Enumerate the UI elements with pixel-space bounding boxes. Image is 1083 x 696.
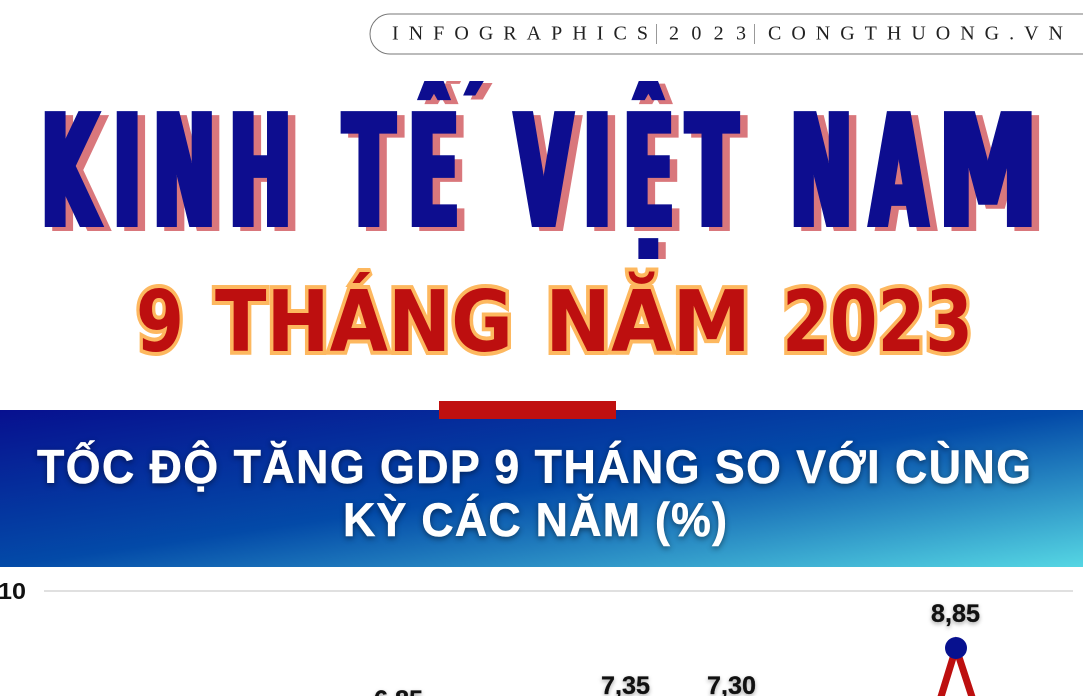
main title: Kinh tế Việt Nam	[44, 81, 1040, 259]
title shadow layer	[52, 81, 1040, 259]
red accent bar	[439, 401, 616, 419]
title shadow layer: KINH	[49, 85, 299, 270]
top pill: infographics 2023 congthuong.vn: INFOGRAPHICS	[392, 22, 648, 44]
title shadow layer: M	[946, 85, 1045, 269]
data point: peak	[945, 637, 967, 659]
heading: GDP growth over nine months: KỲ CÁC NĂM (%)	[343, 493, 727, 546]
subtitle: 9 tháng năm 2023: 9	[136, 273, 184, 372]
title face layer: KINH	[41, 81, 291, 266]
top pill: infographics 2023 congthuong.vn: 2023	[669, 22, 746, 44]
title shadow layer: TẾ	[351, 62, 467, 270]
value label: 8,85: 8,85	[931, 600, 980, 628]
title face layer: NA	[790, 81, 927, 266]
top pill: infographics 2023 congthuong.vn: CONGTHUONG.VN	[768, 22, 1063, 44]
title face layer: ´	[457, 67, 484, 173]
line chart: GDP growth by year	[0, 578, 1073, 696]
subtitle: 9 tháng năm 2023: 2023	[782, 273, 973, 372]
heading: GDP growth over nine months: TỐC ĐỘ TĂNG GDP 9 THÁNG SO VỚI CÙNG	[37, 440, 1031, 493]
heading: GDP growth over nine months	[37, 440, 1031, 546]
subtitle: 9 tháng năm 2023: NĂM	[545, 271, 751, 372]
title face layer: TẾ	[344, 58, 459, 266]
title face layer: M	[938, 81, 1037, 265]
subtitle: 9 tháng năm 2023: THÁNG	[215, 272, 513, 372]
data line: peak segment	[940, 648, 973, 696]
top pill: infographics 2023 congthuong.vn	[370, 14, 1083, 54]
title shadow layer: ´	[464, 71, 492, 177]
title shadow layer: NA	[798, 85, 935, 270]
heading band: GDP growth title background	[0, 410, 1083, 567]
title face layer: VIỆT	[515, 78, 737, 266]
title shadow layer: VIỆT	[523, 82, 745, 270]
subtitle: 9 tháng năm 2023	[136, 271, 973, 372]
title face layer	[44, 81, 1032, 259]
